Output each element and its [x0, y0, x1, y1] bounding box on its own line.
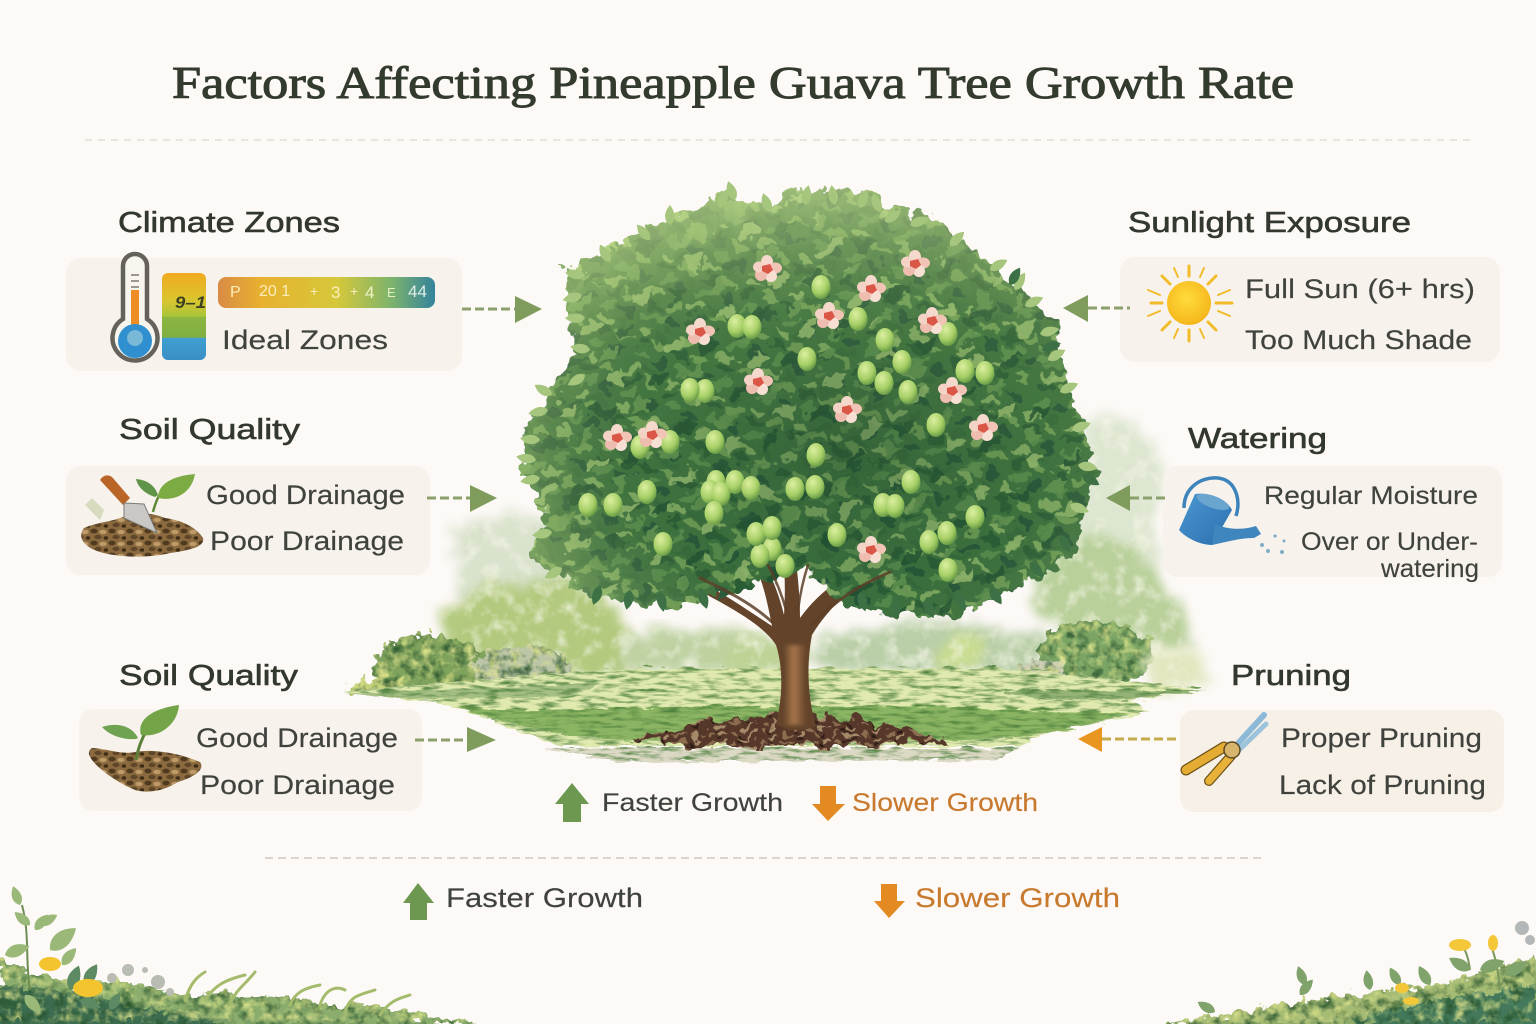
legend: lower growth key [403, 883, 1120, 920]
label: faster growth: Faster Growth [446, 883, 643, 913]
icon: sun [1148, 266, 1232, 341]
label: lack of pruning: Lack of Pruning [1279, 770, 1486, 800]
label: slower growth: Slower Growth [915, 883, 1120, 913]
label: ideal zones: Ideal Zones [222, 325, 388, 355]
icon: orange down arrow [874, 884, 905, 918]
arrow: climate to tree [462, 296, 542, 323]
label: over or under-watering [1301, 528, 1479, 583]
label: poor drainage: Poor Drainage [200, 770, 395, 800]
arrow: sunlight to tree [1063, 295, 1130, 322]
zone colour column: 9–1 [175, 293, 206, 312]
panel: pruning [1180, 660, 1504, 812]
heading: soil quality: Soil Quality [119, 414, 301, 446]
label: over or under-watering: watering [1380, 555, 1479, 583]
title: Factors Affecting Pineapple Guava Tree Growth Rate [172, 58, 1294, 108]
zone scale bar: + [350, 283, 358, 299]
panel: soil quality (sprout) [79, 660, 422, 811]
legend: upper growth key [555, 783, 1038, 822]
label: good drainage: Good Drainage [196, 723, 398, 753]
peripheral leaves [515, 180, 1102, 620]
panel: soil quality (trowel) [66, 414, 430, 575]
zone scale bar: P [230, 284, 241, 301]
ground: lawn, grass and mulch [345, 668, 1205, 762]
label: proper pruning: Proper Pruning [1281, 723, 1482, 753]
panel: watering [1163, 423, 1502, 583]
arrow: sprout soil to tree [415, 727, 496, 752]
heading: soil quality: Soil Quality [119, 660, 299, 692]
arrow: soil quality to tree [427, 485, 497, 512]
label: regular moisture: Regular Moisture [1264, 482, 1478, 510]
zone scale bar: 3 [331, 283, 340, 302]
heading: sunlight exposure: Sunlight Exposure [1128, 207, 1411, 239]
label: too much shade: Too Much Shade [1245, 325, 1472, 355]
guava flowers [603, 250, 998, 563]
arrow: watering to tree [1106, 485, 1165, 511]
guava fruits [578, 275, 994, 582]
icon: green up arrow [555, 783, 589, 822]
icon: trowel and seedling in soil [81, 474, 203, 557]
arrow: pruning to tree [1078, 727, 1180, 752]
central guava tree [515, 180, 1102, 730]
panel: climate zones [66, 207, 462, 371]
zone scale bar: 4 [365, 283, 374, 302]
zone scale bar [218, 277, 435, 308]
background scenery: misty trees and bushes [345, 416, 1207, 695]
icon: thermometer [112, 254, 158, 361]
icon: sprout in soil [89, 705, 201, 792]
label: full sun: Full Sun (6+ hrs) [1245, 274, 1475, 304]
zone scale bar: 44 [408, 282, 427, 301]
label: poor drainage: Poor Drainage [210, 526, 404, 556]
icon: pruning shears [1186, 715, 1266, 781]
tree trunk and branches [680, 530, 893, 730]
label: good drainage: Good Drainage [206, 480, 405, 510]
icon: green up arrow [403, 883, 434, 920]
zone scale bar: + [310, 283, 318, 299]
icon: orange down arrow [812, 786, 845, 821]
branches over the canopy [700, 565, 890, 625]
zone colour column [162, 273, 206, 360]
heading: watering: Watering [1188, 423, 1327, 455]
label: over or under-watering: Over or Under- [1301, 528, 1478, 556]
zone scale bar: E [387, 285, 396, 300]
heading: climate zones: Climate Zones [118, 207, 340, 239]
label: slower growth: Slower Growth [852, 789, 1038, 817]
heading: pruning: Pruning [1231, 660, 1351, 692]
zone scale bar: 20 1 [259, 283, 290, 300]
panel: sunlight exposure [1120, 207, 1500, 362]
foliage: bottom left [0, 885, 480, 1024]
tree canopy foliage [523, 190, 1097, 617]
foliage: bottom right [1160, 921, 1536, 1024]
icon: watering can [1179, 478, 1286, 554]
label: faster growth: Faster Growth [602, 789, 783, 817]
